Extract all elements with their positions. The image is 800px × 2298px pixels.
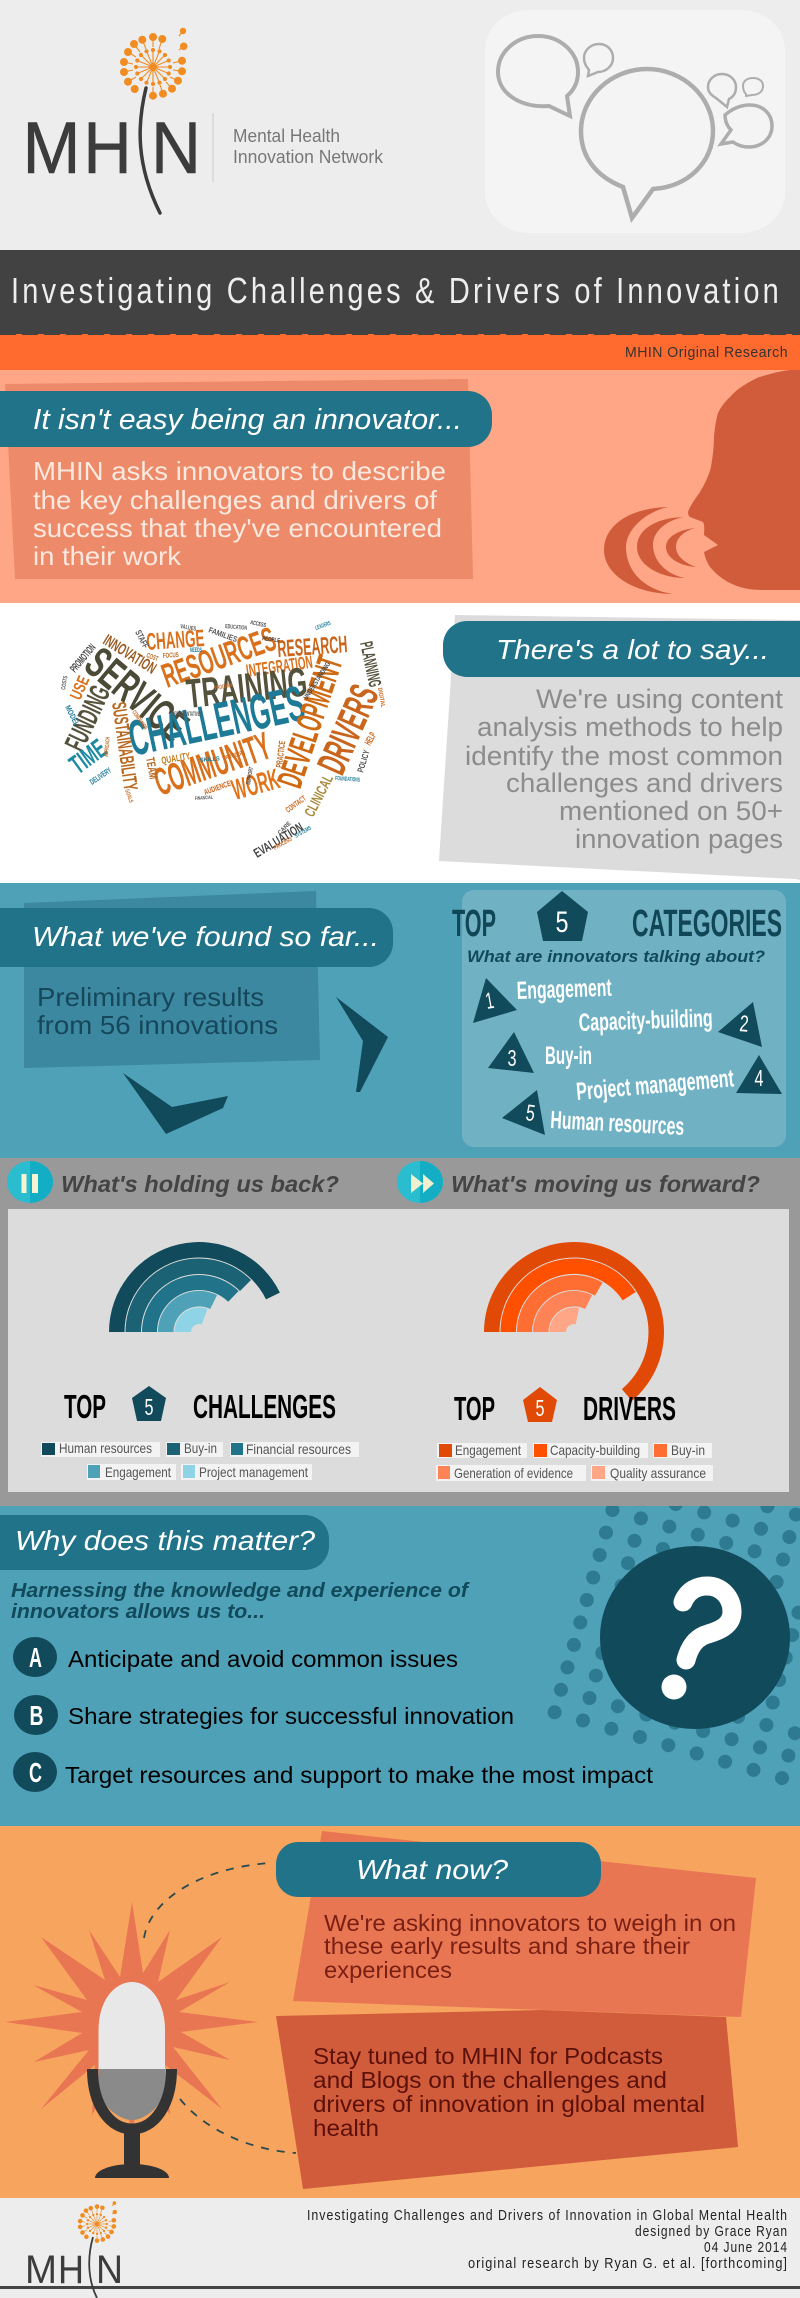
category 5: human resources: 5: [524, 1099, 537, 1126]
word cloud speech bubble: PROMOTION: [68, 642, 99, 675]
body text: identify the most common: [465, 741, 783, 771]
category 5: human resources: [502, 1090, 685, 1141]
body text: [37, 982, 278, 1040]
heading: what's moving us forward: What's moving us forward?: [451, 1171, 760, 1197]
item C: C: [29, 1757, 42, 1788]
text: stay tuned: drivers of innovation in global mental: [313, 2091, 705, 2117]
item C: [13, 1752, 654, 1792]
icon: fast forward: [397, 1161, 443, 1203]
heading pill: Why does this matter?: [15, 1525, 315, 1556]
category 1: engagement: 1: [483, 987, 496, 1014]
icon: MHIN dandelion logo: H: [84, 108, 132, 189]
body text: MHIN asks innovators to describe: [33, 456, 446, 486]
body text: analysis methods to help: [477, 712, 783, 742]
word cloud speech bubble: TIME: [64, 733, 112, 780]
body text: in their work: [33, 541, 182, 571]
heading: top 5 categories: TOP: [452, 903, 496, 945]
word cloud speech bubble: [59, 620, 388, 861]
legend: drivers: Generation of evidence: [454, 1465, 573, 1481]
icon: medium speech bubble right: [721, 105, 772, 147]
category 3: buy-in: Buy-in: [545, 1042, 592, 1070]
panel: charts: [8, 1209, 789, 1492]
word cloud speech bubble: NEEDS: [190, 648, 202, 654]
text: asking innovators: We're asking innovators to weigh in on: [324, 1910, 736, 1936]
legend: challenges: Buy-in: [184, 1440, 217, 1456]
text backing panel: [439, 615, 800, 880]
word cloud speech bubble: WORK: [229, 763, 283, 807]
category 3: buy-in: 3: [508, 1045, 516, 1071]
word cloud speech bubble: TRAINING: [184, 659, 309, 717]
item B: B: [30, 1700, 44, 1731]
dashed connector top: [144, 1863, 270, 1938]
word cloud speech bubble: CLINICAL: [301, 772, 337, 820]
body text: challenges and drivers: [506, 768, 783, 798]
word cloud speech bubble: FOUNDATIONS: [335, 776, 360, 784]
item C: Target resources and support to make the most impact: [65, 1762, 654, 1788]
panel: challenges and drivers: [0, 1158, 800, 1506]
footer credits: [307, 2207, 788, 2272]
icon: small speech bubble: [584, 44, 613, 76]
word cloud speech bubble: CONTACT: [284, 794, 308, 815]
word cloud speech bubble: CHANGE: [146, 625, 205, 656]
question text: What are innovators talking about?: [467, 947, 766, 966]
heading: top 5 challenges: TOP: [64, 1388, 106, 1425]
legend: drivers: Engagement: [455, 1442, 521, 1458]
panel: there's a lot to say: [0, 603, 800, 883]
word cloud speech bubble: SYSTEMS: [294, 826, 313, 840]
word cloud speech bubble: INTEGRATION: [245, 652, 314, 681]
item A: [13, 1637, 458, 1677]
arrow: right chevron: [336, 997, 388, 1092]
word cloud speech bubble: QUALITY: [161, 751, 191, 767]
word cloud speech bubble: EDUCATION: [225, 624, 247, 632]
category 1: engagement: Engagement: [516, 974, 613, 1005]
icon: MHIN dandelion logo: N: [151, 108, 201, 189]
word cloud speech bubble: SUSTAINABILITY: [107, 701, 141, 792]
word cloud speech bubble: REPRESENTATIVES: [172, 712, 202, 718]
word cloud speech bubble: INNOVATION: [100, 632, 159, 678]
heading: top 5 categories: 5: [556, 906, 568, 939]
word cloud speech bubble: CARE: [277, 821, 293, 836]
callout backing: ask innovators: [293, 1831, 756, 2017]
icon: footer logo: [25, 2201, 123, 2298]
body text: Preliminary results: [37, 982, 264, 1012]
body text: We're using content: [536, 684, 784, 714]
logo tagline: Mental Health: [233, 126, 340, 146]
dashed connector bottom: [180, 2099, 296, 2153]
legend: challenges: Financial resources: [246, 1441, 351, 1457]
word cloud speech bubble: MODEL: [63, 704, 81, 728]
body text: [465, 684, 784, 854]
icon: large speech bubble: [581, 69, 713, 218]
word cloud speech bubble: LEADERS: [315, 621, 332, 632]
word cloud speech bubble: RESOURCES: [157, 620, 281, 696]
heading: top 5 drivers: DRIVERS: [583, 1390, 676, 1427]
text: stay tuned: [313, 2043, 705, 2141]
category 3: buy-in: [488, 1032, 592, 1073]
heading: top 5 drivers: [454, 1387, 676, 1427]
panel: what now: [0, 1826, 800, 2198]
category 4: project management: 4: [754, 1065, 764, 1091]
word cloud speech bubble: DEVELOPMENT: [269, 651, 351, 793]
icon: footer logo: H: [58, 2248, 84, 2292]
word cloud speech bubble: COST: [145, 652, 159, 663]
category 2: capacity-building: 2: [739, 1010, 750, 1037]
icon: footer logo: M: [25, 2248, 57, 2292]
word cloud speech bubble: SKILLS: [200, 756, 220, 764]
heading: top 5 drivers: TOP: [454, 1390, 495, 1427]
legend: challenges: Human resources: [59, 1440, 152, 1456]
arrow: down chevron: [123, 1073, 228, 1134]
body text: innovation pages: [575, 824, 783, 854]
subtitle band: [0, 334, 800, 370]
heading pill: What now?: [356, 1854, 508, 1885]
text: asking innovators: these early results and share their: [324, 1933, 690, 1959]
heading: top 5 challenges: CHALLENGES: [193, 1388, 336, 1425]
legend: drivers: [436, 1442, 713, 1481]
text: asking innovators: experiences: [324, 1957, 452, 1983]
icon: question mark: [600, 1546, 790, 1729]
heading pill: [276, 1842, 601, 1897]
icon: footer logo: N: [96, 2248, 123, 2292]
body text: success that they've encountered: [33, 513, 442, 543]
word cloud speech bubble: AUDIENCE: [203, 779, 232, 797]
body text: from 56 innovations: [37, 1010, 278, 1040]
callout backing: stay tuned: [276, 2010, 738, 2189]
icon: top-left speech bubble: [498, 36, 578, 116]
word cloud speech bubble: PEOPLE: [262, 636, 280, 644]
word cloud speech bubble: COMPANION: [130, 710, 148, 731]
icon: microphone with starburst: [5, 1902, 258, 2178]
logo tagline: [233, 126, 384, 167]
word cloud speech bubble: CHALLENGES: [124, 675, 309, 767]
text backing panel: [5, 379, 473, 579]
body text: the key challenges and drivers of: [33, 485, 438, 515]
item B: Share strategies for successful innovation: [68, 1703, 514, 1729]
text: stay tuned: Stay tuned to MHIN for Podcasts: [313, 2043, 663, 2069]
word cloud speech bubble: SERVICE: [76, 638, 197, 752]
panel: why does this matter: [0, 1497, 800, 1826]
word cloud speech bubble: POLICY: [355, 749, 372, 774]
category 1: engagement: [473, 974, 613, 1023]
heading pill: [443, 621, 800, 677]
word cloud speech bubble: PROGRAM: [214, 683, 233, 692]
heading: top 5 categories: [452, 891, 782, 945]
legend: challenges: [41, 1440, 359, 1480]
word cloud speech bubble: COMMUNITY: [149, 725, 276, 805]
item B: [14, 1695, 514, 1735]
footer: [0, 2198, 800, 2298]
logo tagline: Innovation Network: [233, 147, 384, 167]
text backing panel: [24, 891, 320, 1068]
lead text: innovators allows us to...: [11, 1601, 265, 1623]
heading pill: [0, 391, 492, 447]
word cloud speech bubble: PLANNING: [356, 640, 385, 689]
item A: A: [29, 1642, 42, 1673]
word cloud speech bubble: USE: [66, 673, 93, 703]
category 5: human resources: Human resources: [550, 1106, 685, 1141]
text: stay tuned: health: [313, 2115, 379, 2141]
header section: [0, 0, 800, 250]
panel: top 5 categories: [452, 890, 786, 1147]
word cloud speech bubble: DRIVERS: [308, 678, 388, 781]
decorative dot field: [548, 1506, 800, 1785]
panel: it isn't easy being an innovator: [0, 370, 800, 603]
word cloud speech bubble: RESEARCH: [277, 631, 348, 663]
panel: what we've found so far: [0, 883, 800, 1159]
word cloud speech bubble: GOALS: [123, 789, 134, 804]
word cloud speech bubble: STAFF: [133, 628, 151, 650]
heading pill: [0, 908, 393, 967]
word cloud speech bubble: SUPPORT: [246, 766, 255, 785]
title band: [0, 250, 800, 334]
subtitle band: MHIN Original Research: [625, 344, 788, 361]
heading pill: There's a lot to say...: [496, 634, 769, 665]
word cloud speech bubble: PROCESS: [273, 837, 293, 852]
item A: Anticipate and avoid common issues: [68, 1646, 458, 1672]
category 2: capacity-building: [578, 1002, 762, 1047]
heading: top 5 drivers: 5: [536, 1395, 544, 1421]
legend: challenges: Engagement: [105, 1464, 171, 1480]
legend: challenges: Project management: [199, 1464, 308, 1480]
heading: what's holding us back: What's holding us back?: [61, 1171, 339, 1197]
body text: mentioned on 50+: [559, 796, 783, 826]
heading: top 5 challenges: 5: [144, 1394, 154, 1420]
heading pill: It isn't easy being an innovator...: [33, 404, 462, 436]
heading pill: [0, 1515, 329, 1570]
word cloud speech bubble: DIGITAL: [376, 687, 385, 708]
text: asking innovators: [324, 1910, 736, 1983]
word cloud speech bubble: EVALUATION: [251, 819, 306, 861]
icon: tiny speech bubble: [743, 78, 763, 96]
word cloud speech bubble: PRACTICE: [274, 740, 287, 768]
lead text: Harnessing the knowledge and experience of: [11, 1580, 470, 1602]
icon: pause: [7, 1161, 53, 1203]
word cloud speech bubble: COSTS: [61, 676, 69, 690]
body text: [33, 456, 446, 571]
icon: MHIN dandelion logo: [22, 28, 214, 213]
word cloud speech bubble: VALUES: [180, 624, 196, 633]
lead text: [11, 1580, 470, 1623]
word cloud speech bubble: PROVIDERS: [223, 750, 246, 762]
word cloud speech bubble: FOCUS: [163, 652, 179, 660]
word cloud speech bubble: FAMILIES: [207, 625, 239, 644]
panel: speech bubbles: [485, 10, 785, 233]
word cloud speech bubble: FUNDING: [59, 681, 117, 756]
heading: top 5 challenges: [64, 1386, 336, 1425]
category 2: capacity-building: Capacity-building: [578, 1004, 713, 1037]
icon: speaking head: [604, 370, 800, 594]
legend: drivers: Buy-in: [671, 1442, 705, 1458]
legend: drivers: Quality assurance: [610, 1465, 706, 1481]
word cloud speech bubble: ACCESS: [250, 620, 266, 629]
word cloud speech bubble: TEAM: [143, 756, 161, 780]
icon: MHIN dandelion logo: M: [22, 108, 80, 189]
word cloud speech bubble: FINANCIAL: [195, 795, 213, 802]
legend: drivers: Capacity-building: [550, 1442, 640, 1458]
heading pill: What we've found so far...: [32, 921, 379, 952]
word cloud speech bubble: APPROACH: [104, 737, 112, 757]
text: stay tuned: and Blogs on the challenges and: [313, 2067, 667, 2093]
word cloud speech bubble: DELIVERY: [88, 766, 113, 787]
icon: small speech bubble right: [708, 74, 736, 107]
chart: top 5 drivers radial bars: [484, 1242, 664, 1401]
word cloud speech bubble: HELP: [363, 731, 379, 748]
word cloud speech bubble: UNDERSTANDING: [303, 661, 332, 701]
chart: top 5 challenges radial bars: [109, 1242, 280, 1332]
